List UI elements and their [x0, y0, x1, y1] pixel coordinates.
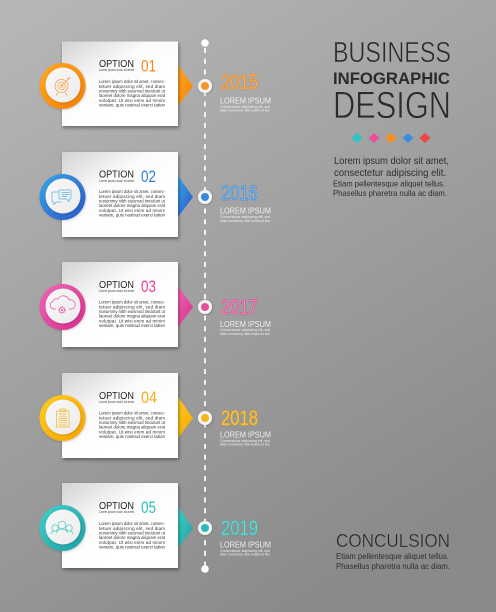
card 4	[62, 373, 178, 458]
body text 1	[99, 79, 166, 108]
step 1: option 01 / 2015	[40, 42, 271, 126]
card 3	[62, 262, 178, 347]
body text 5	[99, 521, 166, 550]
body text 1: veniam, quis nostrud exerci tation	[99, 103, 165, 108]
conclusion: CONCULSION	[336, 531, 450, 551]
heading 2: OPTION	[99, 168, 134, 180]
badge 4 with clipboard icon	[40, 395, 86, 441]
timeline node 3	[198, 300, 212, 314]
body text 3: tetuer adipiscing elit, sed diam	[99, 304, 165, 310]
caption 4: LOREM IPSUM	[220, 430, 271, 440]
title: BUSINESS	[333, 37, 451, 69]
diamond colour markers	[352, 133, 430, 143]
body text 5: volutpat. Ut wisi enim ad minim	[99, 540, 165, 545]
body text 2: veniam, quis nostrud exerci tation	[99, 213, 165, 218]
body text 4	[99, 410, 166, 439]
body text 4: volutpat. Ut wisi enim ad minim	[99, 430, 165, 434]
conclusion: Phasellus pharetra nulla ac diam.	[336, 561, 450, 571]
caption 3: LOREM IPSUM	[220, 319, 271, 329]
body text 2: tetuer adipiscing elit, sed diam	[99, 194, 165, 199]
arrow 1	[178, 65, 193, 106]
heading 3	[99, 277, 156, 296]
body text 2: volutpat. Ut wisi enim ad minim	[99, 208, 165, 213]
body text 2: nonummy nibh euismod tincidunt ut	[99, 199, 166, 204]
timeline node 5	[198, 521, 212, 535]
caption 3	[220, 319, 271, 336]
body text 5: Lorem ipsum dolor sit amet, consec-	[99, 521, 165, 526]
year 2015: 2015	[221, 71, 258, 94]
heading 5: Lorem ipsum dolor sit amet	[99, 510, 134, 514]
badge 2 with chat icon	[40, 174, 86, 220]
body text 4: Lorem ipsum dolor sit amet, consec-	[99, 410, 165, 416]
conclusion: Etiam pellentesque aliquet tellus.	[336, 551, 449, 561]
body text 2: laoreet dolore magna aliquam erat	[99, 203, 166, 208]
intro text: Phasellus pharetra nulla ac diam.	[333, 188, 447, 198]
intro text: Lorem ipsum dolor sit amet,	[334, 155, 449, 167]
year 2016: 2016	[221, 182, 258, 205]
caption 3: diam nonummy nibh euismod tinc	[220, 332, 270, 336]
arrow 3	[178, 286, 193, 327]
body text 3: veniam, quis nostrud exerci tation	[99, 323, 165, 328]
card 2	[62, 152, 178, 237]
body text 4: laoreet dolore magna aliquam erat	[99, 425, 166, 430]
heading 1: 01	[141, 56, 156, 76]
arrow 5	[178, 507, 193, 548]
heading 3: OPTION	[99, 279, 134, 291]
arrow 2	[178, 176, 193, 217]
body text 4: tetuer adipiscing elit, sed diam	[99, 416, 165, 420]
heading 4: OPTION	[99, 390, 134, 402]
caption 1: diam nonummy nibh euismod tinc	[220, 109, 270, 113]
heading 5	[99, 498, 156, 517]
badge 1 with target icon	[40, 63, 86, 109]
timeline node 2	[198, 190, 212, 204]
body text 4: veniam, quis nostrud exerci tation	[99, 434, 165, 439]
caption 5: Consectetuer adipiscing elit, sed	[220, 549, 270, 553]
step 4: option 04 / 2018	[40, 373, 271, 458]
heading 5: OPTION	[99, 500, 134, 512]
caption 4: Consectetuer adipiscing elit, sed	[220, 439, 270, 443]
heading 2	[99, 167, 156, 186]
body text 1: tetuer adipiscing elit, sed diam	[99, 84, 165, 89]
title	[333, 37, 451, 127]
step 2: option 02 / 2016	[40, 152, 271, 237]
caption 5: LOREM IPSUM	[220, 540, 271, 550]
caption 2: LOREM IPSUM	[220, 206, 271, 216]
body text 2: Lorem ipsum dolor sit amet, consec-	[99, 189, 165, 194]
body text 1: volutpat. Ut wisi enim ad minim	[99, 98, 165, 103]
caption 1	[220, 96, 271, 113]
caption 5: diam nonummy nibh euismod tinc	[220, 553, 270, 557]
intro text	[333, 155, 449, 198]
caption 1: Consectetuer adipiscing elit, sed	[220, 105, 270, 109]
timeline node 1	[198, 79, 212, 93]
body text 5: nonummy nibh euismod tincidunt ut	[99, 531, 166, 536]
badge 3 with cloud icon	[40, 284, 86, 330]
heading 1: OPTION	[99, 58, 134, 70]
body text 5: laoreet dolore magna aliquam erat	[99, 535, 166, 540]
caption 2: diam nonummy nibh euismod tinc	[220, 219, 270, 223]
body text 5: tetuer adipiscing elit, sed diam	[99, 526, 165, 531]
heading 2: Lorem ipsum dolor sit amet	[99, 179, 134, 183]
step 3: option 03 / 2017	[40, 262, 271, 347]
body text 2	[99, 189, 166, 218]
body text 5: veniam, quis nostrud exerci tation	[99, 545, 165, 550]
body text 3: Lorem ipsum dolor sit amet, consec-	[99, 300, 165, 304]
card 1	[62, 42, 178, 126]
year 2017: 2017	[221, 296, 258, 319]
caption 2	[220, 206, 271, 223]
timeline node 4	[198, 411, 212, 425]
caption 1: LOREM IPSUM	[220, 96, 271, 106]
conclusion	[336, 531, 450, 571]
body text 1: Lorem ipsum dolor sit amet, consec-	[99, 79, 165, 84]
body text 3: laoreet dolore magna aliquam erat	[99, 314, 166, 319]
intro text: consectetur adipiscing elit.	[334, 167, 446, 179]
caption 4: diam nonummy nibh euismod tinc	[220, 443, 270, 447]
caption 4	[220, 430, 271, 447]
title: DESIGN	[333, 85, 451, 127]
caption 3: Consectetuer adipiscing elit, sed	[220, 328, 270, 332]
heading 3: 03	[141, 277, 156, 296]
body text 4: nonummy nibh euismod tincidunt ut	[99, 420, 166, 425]
heading 3: Lorem ipsum dolor sit amet	[99, 289, 134, 293]
body text 1: laoreet dolore magna aliquam erat	[99, 93, 166, 98]
card 5	[62, 483, 178, 568]
timeline dashed line	[201, 39, 209, 573]
intro text: Etiam pellentesque aliquet tellus.	[333, 178, 445, 188]
step 5: option 05 / 2019	[40, 483, 271, 568]
year 2018: 2018	[221, 407, 258, 430]
body text 3	[99, 300, 166, 328]
badge 5 with people icon	[40, 505, 86, 551]
heading 4: 04	[141, 388, 157, 407]
heading 1: Lorem ipsum dolor sit amet	[99, 68, 134, 72]
heading 5: 05	[141, 498, 156, 517]
body text 3: nonummy nibh euismod tincidunt ut	[99, 309, 166, 314]
caption 5	[220, 540, 271, 557]
title: INFOGRAPHIC	[333, 70, 450, 88]
body text 1: nonummy nibh euismod tincidunt ut	[99, 89, 166, 94]
heading 1	[99, 56, 156, 76]
caption 2: Consectetuer adipiscing elit, sed	[220, 215, 270, 219]
heading 4: Lorem ipsum dolor sit amet	[99, 400, 134, 404]
year 2019: 2019	[221, 517, 258, 540]
arrow 4	[178, 397, 193, 438]
body text 3: volutpat. Ut wisi enim ad minim	[99, 318, 165, 324]
heading 4	[99, 388, 157, 407]
heading 2: 02	[141, 167, 156, 186]
